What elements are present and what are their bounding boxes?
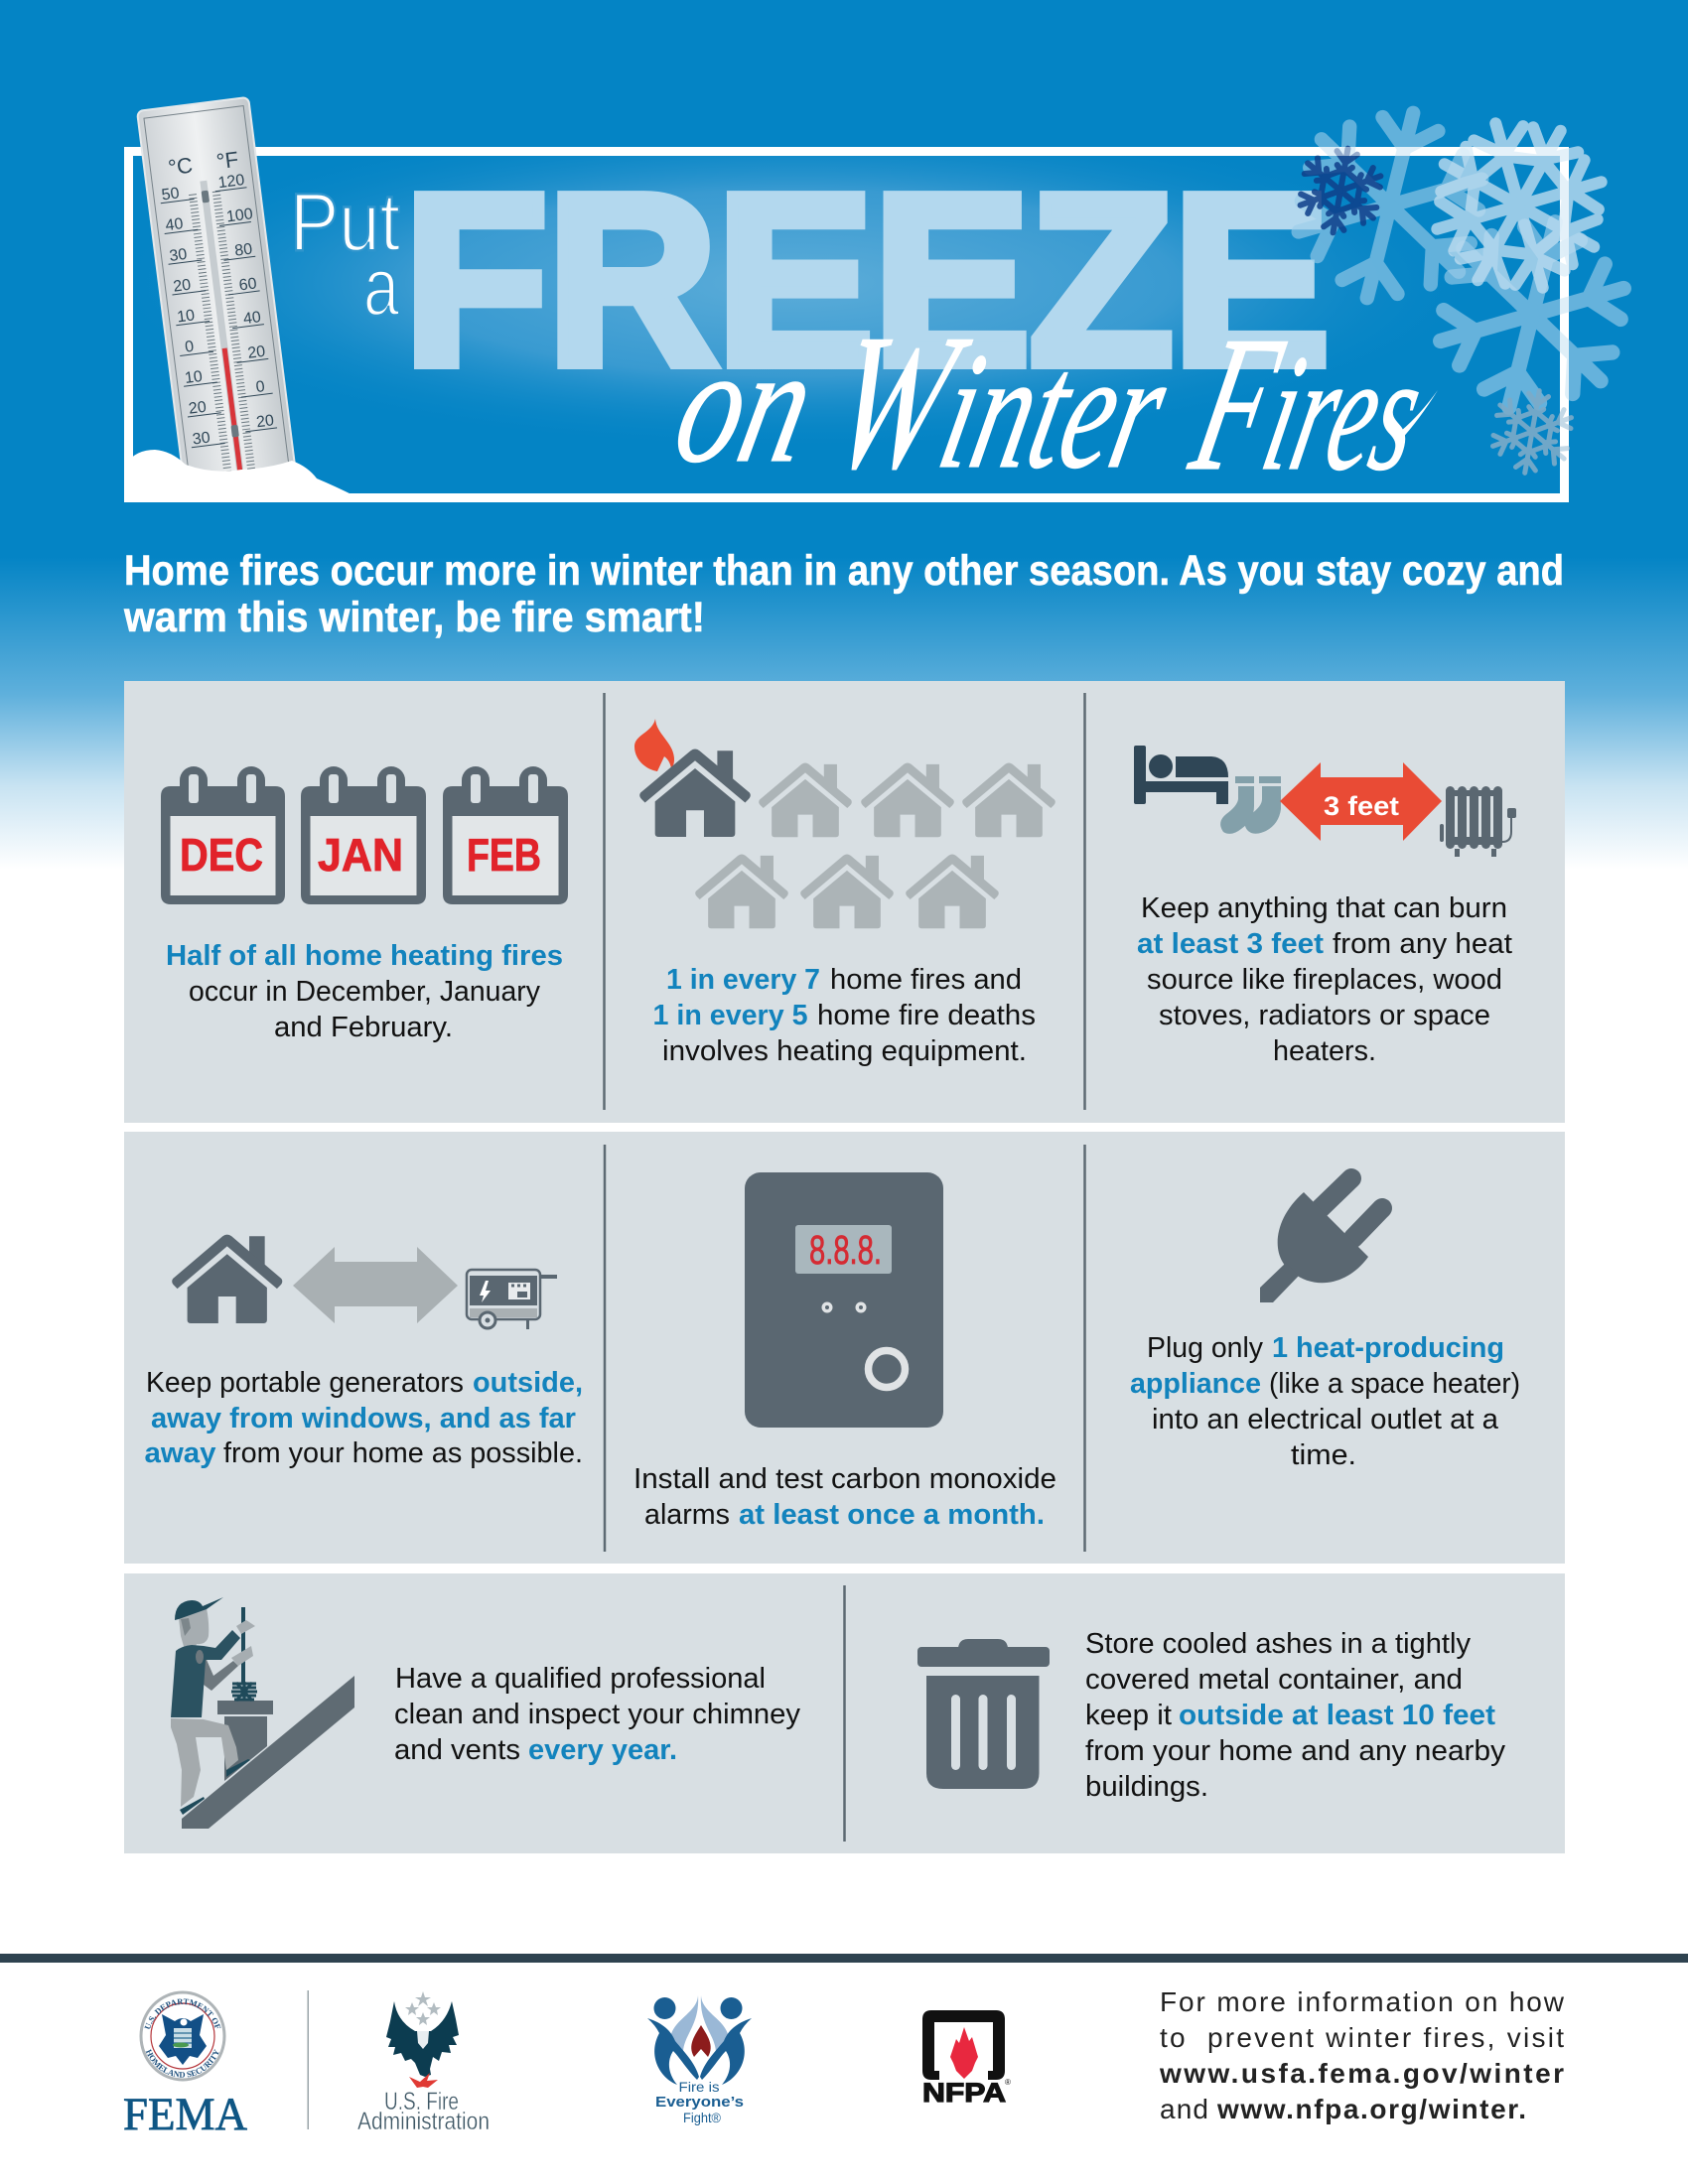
text: keep anything 3 feet: heaters.: [1273, 1035, 1376, 1067]
logo: DHS seal and FEMA: [123, 1991, 248, 2140]
text: keep portable generators: Keep portable generators: [146, 1367, 464, 1399]
logo: U.S. Fire Administration: [357, 1991, 490, 2135]
text: chimney inspection: and vents: [394, 1734, 520, 1766]
text: store cooled ashes: [1085, 1628, 1506, 1803]
text: chimney inspection: every year.: [528, 1734, 677, 1766]
thermometer: [137, 97, 296, 485]
icon: socks: [1220, 776, 1281, 834]
text: keep portable generators: [145, 1367, 583, 1469]
roof: [182, 1676, 354, 1829]
text: plug only: into an electrical outlet at a: [1152, 1404, 1499, 1435]
text: store cooled ashes: keep it: [1085, 1700, 1172, 1731]
thermometer: 20: [172, 277, 192, 296]
text: install co alarms: alarms: [644, 1499, 730, 1531]
panel: row 1: [124, 681, 1565, 1123]
icon: row of houses: [634, 719, 1055, 928]
text: keep anything 3 feet: [1137, 892, 1512, 1067]
intro text: [123, 547, 1564, 641]
text: store cooled ashes: from your home and any nearby: [1085, 1735, 1506, 1767]
icon: generator: [467, 1270, 557, 1329]
header glow: [266, 156, 1364, 421]
text: more information: www.usfa.fema.gov/winter: [1159, 2058, 1564, 2089]
seal: HOMELAND SECURITY: [145, 2049, 219, 2078]
thermometer: °C: [167, 153, 195, 180]
text: half of all home heating fires: [166, 940, 563, 1043]
text: chimney inspection: [394, 1663, 800, 1766]
word: Put a: a: [363, 240, 400, 333]
thermometer: 0: [255, 378, 266, 396]
text: more information: [1159, 1986, 1565, 2124]
thermometer: 20: [255, 412, 275, 431]
text: half of all home heating fires: Half of all home heating fires: [166, 940, 563, 972]
script title: on Winter Fires: Winter: [814, 295, 1189, 509]
snowflake navy: [1292, 141, 1389, 240]
calendar: DEC: DEC: [180, 829, 263, 881]
text: 1 in every 7: home fire deaths: [817, 1000, 1036, 1031]
text: chimney inspection: Have a qualified professional: [395, 1663, 766, 1695]
icon: grey houses: [695, 762, 1055, 928]
icon: bed, socks, arrow and radiator: [1134, 746, 1516, 857]
text: keep anything 3 feet: at least 3 feet: [1137, 928, 1324, 960]
text: install co alarms: Install and test carbon monoxide: [633, 1463, 1056, 1495]
logo: NFPA: ®: [1005, 2078, 1011, 2087]
calendars icon: [161, 766, 568, 904]
text: plug only: Plug only: [1147, 1332, 1263, 1364]
icon: burning house: [639, 750, 751, 837]
text: store cooled ashes: Store cooled ashes in a tightly: [1085, 1628, 1471, 1660]
logo: NFPA: NFPA: [922, 2078, 1006, 2108]
text: keep anything 3 feet: Keep anything that can burn: [1141, 892, 1507, 924]
script title: on Winter Fires: Fires: [1176, 298, 1444, 511]
arrow: grey double: [293, 1247, 458, 1323]
text: more information: www.nfpa.org/winter.: [1216, 2094, 1526, 2124]
text: chimney inspection: clean and inspect your chimney: [394, 1699, 800, 1730]
text: install co alarms: at least once a month.: [739, 1499, 1045, 1531]
text: 1 in every 7: 1 in every 7: [666, 964, 820, 996]
calendar: JAN: JAN: [318, 829, 403, 881]
text: store cooled ashes: buildings.: [1085, 1771, 1208, 1803]
panel: row 2: [124, 1132, 1565, 1564]
brush: [231, 1607, 257, 1701]
text: plug only: time.: [1291, 1439, 1356, 1471]
text: keep portable generators: outside,: [473, 1367, 583, 1399]
thermometer: 60: [238, 275, 258, 294]
text: 1 in every 7: involves heating equipment.: [662, 1035, 1027, 1067]
thermometer: 100: [225, 205, 254, 225]
panel: row 3: [124, 1573, 1565, 1853]
text: keep anything 3 feet: stoves, radiators or space: [1159, 1000, 1490, 1031]
text: plug only: 1 heat-producing: [1272, 1332, 1504, 1364]
text: keep portable generators: away: [145, 1437, 216, 1469]
logo: Fire is Everyone's Fight: [647, 1995, 752, 2125]
text: 1 in every 7: [653, 964, 1036, 1067]
thermometer: 40: [165, 215, 185, 234]
logo: NFPA: [922, 2010, 1011, 2108]
thermometer: 10: [176, 307, 196, 327]
icon: house: [172, 1235, 282, 1323]
thermometer: 20: [188, 399, 208, 418]
icon: electric plug: [1260, 1178, 1382, 1302]
icon: house, arrow and generator: [172, 1235, 557, 1329]
logo: U.S. Fire Administration: Administration: [357, 2108, 490, 2135]
word: Put a: [290, 176, 400, 333]
icon: chimney sweep: [171, 1597, 354, 1829]
wordmark: FEMA: FEMA: [123, 2089, 247, 2140]
text: plug only: appliance: [1130, 1368, 1261, 1400]
icon: bed: [1134, 746, 1228, 804]
stars: [405, 1991, 441, 2025]
thermometer: 120: [217, 172, 245, 192]
snowflake small lower: [1484, 383, 1580, 480]
thermometer: 40: [242, 309, 262, 328]
script title: on Winter Fires: on: [661, 313, 830, 497]
word: FREEZE: FREEZE: [404, 144, 1330, 415]
text: half of all home heating fires: occur in December, January: [189, 976, 540, 1008]
text: more information: For more information on how: [1160, 1986, 1565, 2017]
text: keep portable generators: from your home as possible.: [223, 1437, 583, 1469]
intro text: warm this winter, be fire smart!: [123, 594, 705, 641]
snow mound: [124, 450, 355, 502]
seal: [139, 1991, 226, 2081]
calendar: FEB: FEB: [467, 829, 541, 881]
thermometer: 10: [184, 368, 204, 387]
chimney: [217, 1701, 273, 1781]
snowflake large lower: [1415, 199, 1649, 431]
snowflakes: [1273, 89, 1649, 480]
thermometer: 30: [192, 429, 211, 449]
text: 1 in every 7: home fires and: [830, 964, 1022, 996]
wordmark: U.S. Fire: [384, 2088, 459, 2116]
text: store cooled ashes: covered metal container, and: [1085, 1664, 1463, 1696]
label: 3 feet: 3 feet: [1324, 791, 1399, 821]
thermometer: °F: [214, 147, 240, 174]
text: 1 in every 7: 1 in every 5: [653, 1000, 808, 1031]
text: more information: to prevent winter fires, visit: [1160, 2022, 1564, 2053]
arrow: 3 feet: [1280, 762, 1442, 841]
logo: Fire is Everyone's Fight: Fire is: [679, 2079, 719, 2095]
icon: flame on house: [634, 719, 674, 771]
text: keep portable generators: away from windows, and as far: [151, 1403, 576, 1434]
footer rule: [0, 1954, 1688, 1963]
thermometer: 80: [233, 241, 253, 260]
text: keep anything 3 feet: from any heat: [1333, 928, 1512, 960]
logo: Fire is Everyone's Fight: Fight®: [683, 2110, 722, 2125]
thermometer: 30: [169, 246, 188, 265]
text: plug only: (like a space heater): [1269, 1368, 1520, 1400]
flame: [409, 2073, 438, 2088]
eagle: [386, 2001, 459, 2077]
thermometer: 50: [161, 185, 181, 204]
snowflake large left: [1273, 89, 1507, 322]
text: half of all home heating fires: and February.: [274, 1012, 453, 1043]
calendar: FEB: [443, 766, 568, 904]
calendar: DEC: [161, 766, 285, 904]
header banner: [99, 89, 1649, 511]
icon: carbon monoxide alarm: 8.8.8.: [809, 1227, 882, 1273]
logo: Fire is Everyone's Fight: Everyone’s: [655, 2094, 744, 2111]
seal: U.S. DEPARTMENT OF: [144, 1998, 220, 2029]
snowflake white hex: [1414, 100, 1624, 311]
icon: carbon monoxide alarm: [745, 1172, 943, 1428]
icon: radiator: [1440, 786, 1516, 857]
text: install co alarms: [633, 1463, 1056, 1531]
calendar: JAN: [301, 766, 426, 904]
script title: on Winter Fires: [661, 295, 1444, 511]
text: more information: and: [1160, 2094, 1208, 2124]
worker: [171, 1597, 255, 1815]
text: keep anything 3 feet: source like fireplaces, wood: [1147, 964, 1502, 996]
text: store cooled ashes: outside at least 10 feet: [1179, 1700, 1495, 1731]
thermometer: 20: [246, 343, 266, 362]
banner frame: [129, 151, 1565, 498]
word: Put a: Put: [290, 176, 400, 268]
thermometer: 0: [184, 339, 195, 356]
text: plug only: [1130, 1332, 1520, 1471]
icon: trash can: [917, 1639, 1050, 1789]
